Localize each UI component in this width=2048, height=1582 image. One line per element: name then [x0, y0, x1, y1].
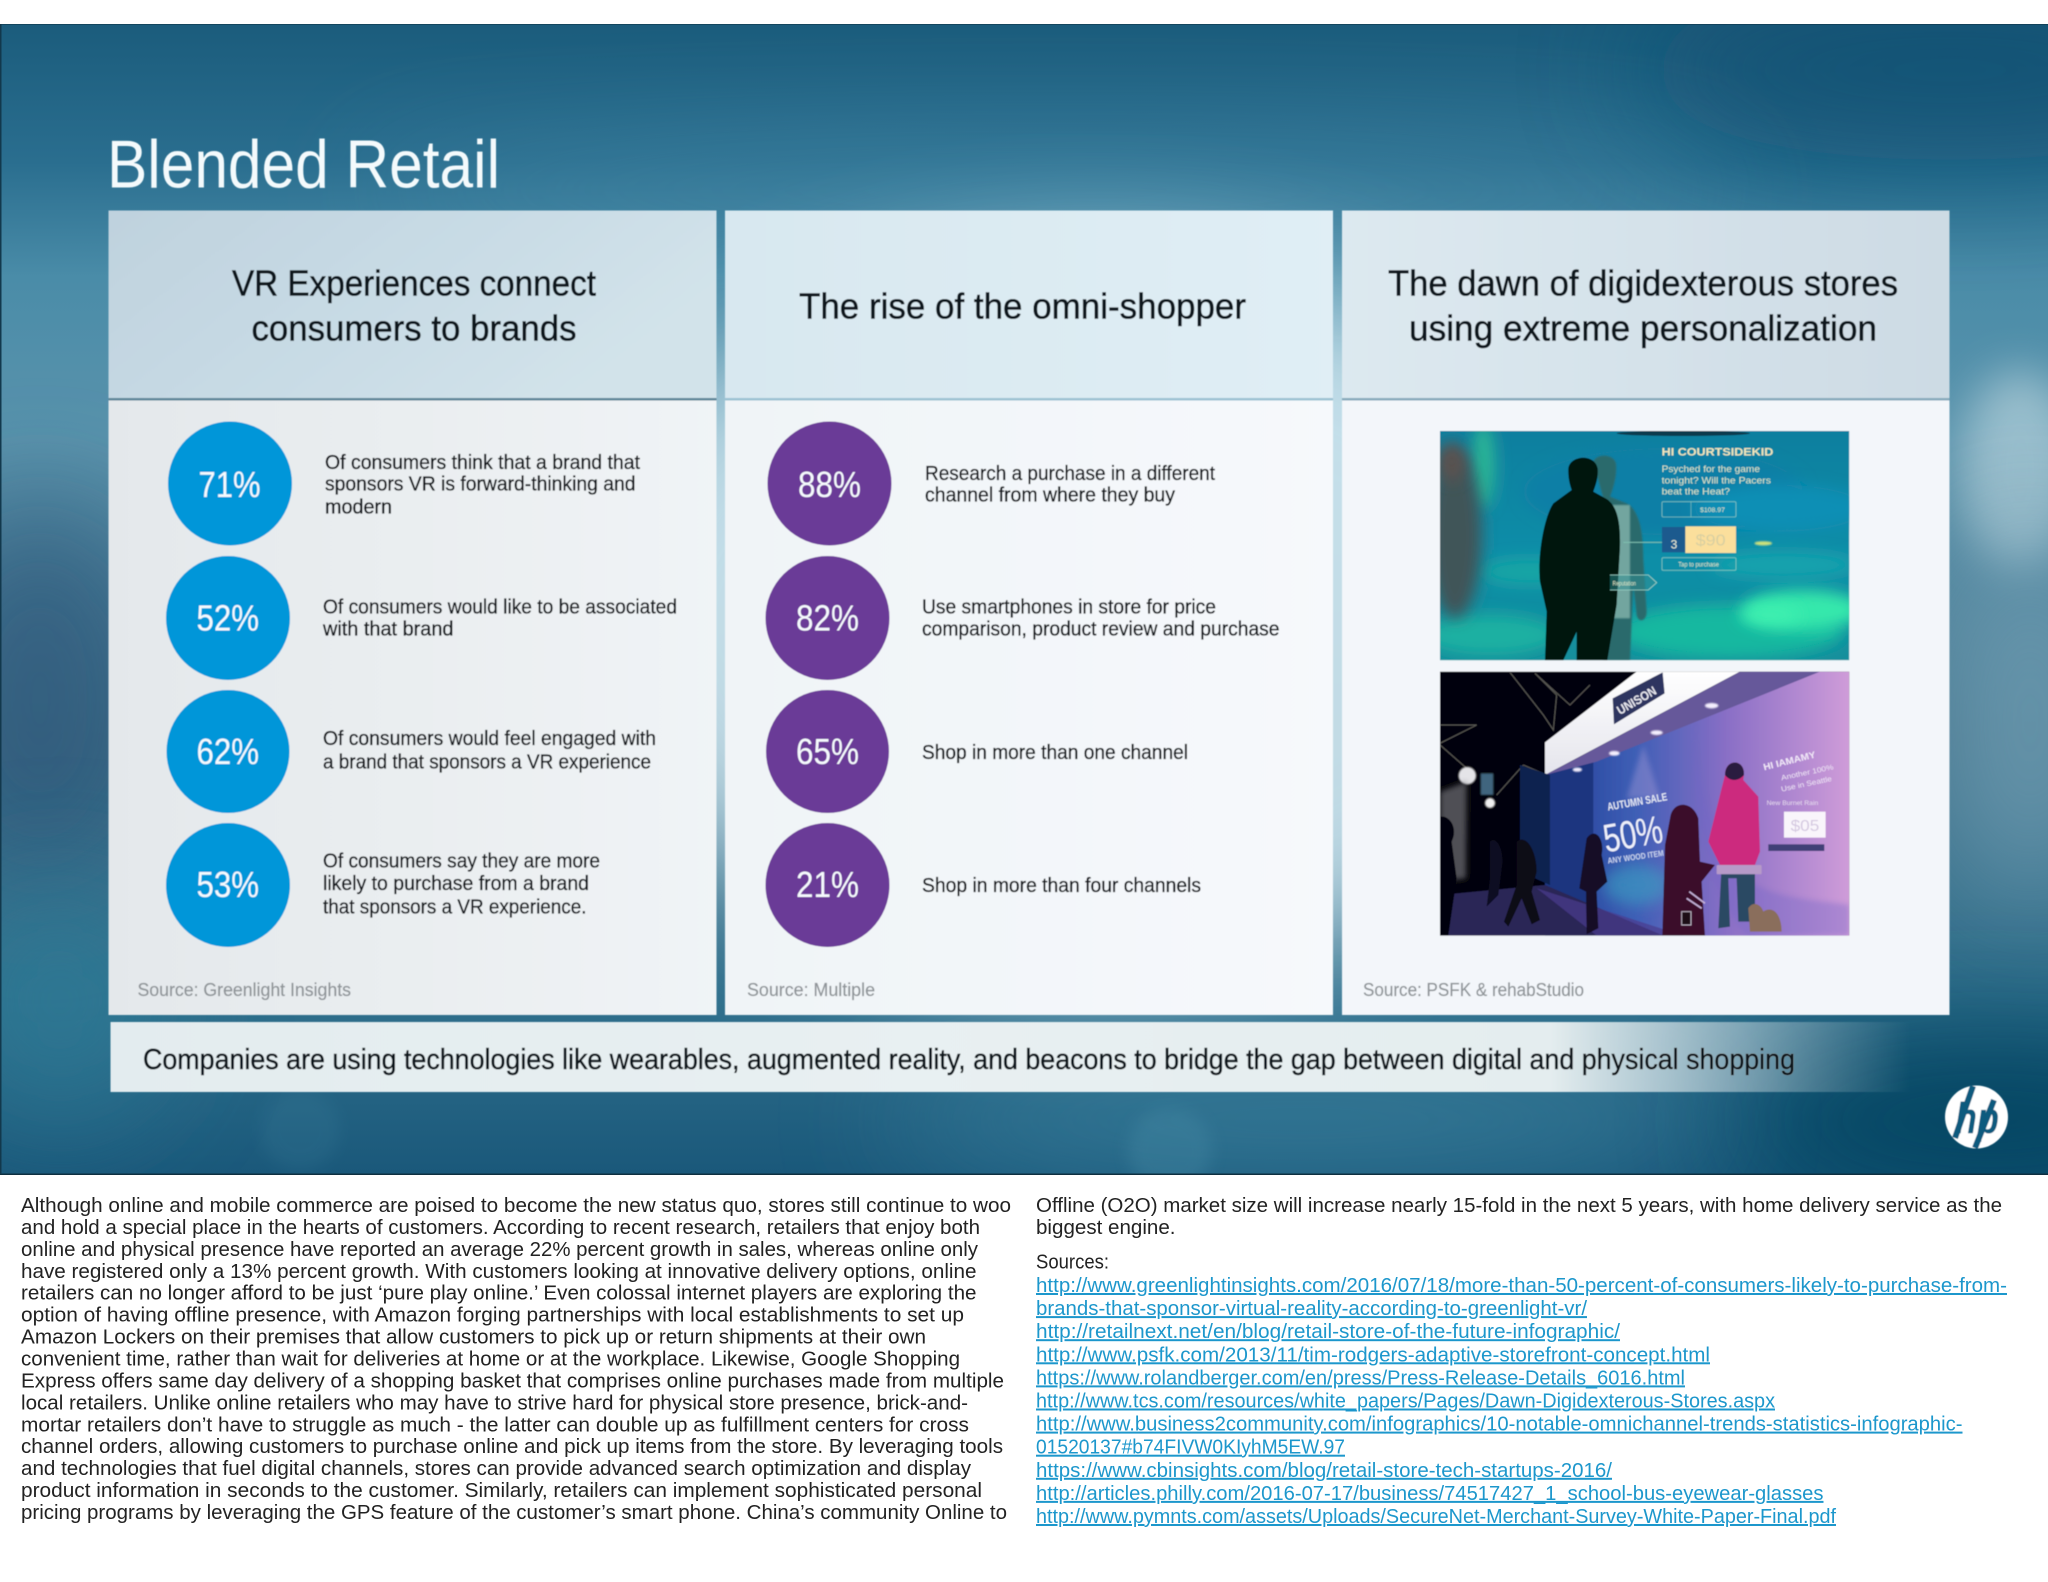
overlay: sale message: ANY WOOD ITEM	[1607, 848, 1664, 866]
overlay: sale message: AUTUMN SALE	[1606, 791, 1668, 814]
stat: 82%	[766, 556, 1280, 680]
panel header: VR experiences: VR Experiences connect	[232, 262, 596, 304]
overlay: personalised offer: New Burnet Rain	[1767, 800, 1819, 807]
store wall	[1545, 672, 1849, 936]
stat: 71%: 71%	[198, 464, 260, 505]
stat: 52%: with that brand	[322, 618, 454, 640]
stat: 65%: 65%	[796, 731, 859, 772]
stat: 88%: Research a purchase in a different	[925, 463, 1215, 485]
panel body background	[108, 400, 716, 1015]
article text: left column: online and physical presence have reported an average 22% percent growth in sales, whereas online only	[21, 1239, 978, 1261]
shopper silhouette	[1539, 458, 1620, 660]
panel: omni-shopper	[725, 210, 1333, 1015]
stat: 62%: 62%	[196, 731, 259, 772]
sources list: http://www.greenlightinsights.com/2016/07/18/more-than-50-percent-of-consumers-likely-to-purchase-from-	[1036, 1275, 2007, 1297]
sources list: https://www.cbinsights.com/blog/retail-store-tech-startups-2016/	[1036, 1460, 1612, 1482]
stat: 53%: that sponsors a VR experience.	[323, 896, 586, 918]
panel body background	[1342, 400, 1950, 1015]
stat: 65%: Shop in more than one channel	[922, 742, 1188, 764]
panel header: digidexterous stores: The dawn of digidexterous stores	[1388, 262, 1898, 304]
stat: 21%: Shop in more than four channels	[922, 875, 1201, 897]
stat: 88%: channel from where they buy	[925, 484, 1175, 506]
overlay: personalised message: 3	[1671, 538, 1678, 552]
overlay: personalised message: Psyched for the game	[1662, 464, 1760, 474]
sources list	[1036, 1252, 2007, 1528]
stat: 88%	[768, 422, 1215, 546]
storefront floor	[1440, 885, 1663, 936]
article text: left column: convenient time, rather than wait for deliveries at home or at the workplace. Likewise, Google Shopping	[21, 1348, 960, 1370]
stat: 82%: comparison, product review and purchase	[922, 618, 1280, 640]
panel: digidexterous stores	[1342, 210, 1950, 1015]
sources list: http://www.psfk.com/2013/11/tim-rodgers-adaptive-storefront-concept.html	[1036, 1344, 1710, 1366]
sources list: http://retailnext.net/en/blog/retail-store-of-the-future-infographic/	[1036, 1321, 1620, 1343]
stat: 52%: Of consumers would like to be associated	[323, 596, 677, 618]
source: Greenlight Insights: Source: Greenlight Insights	[138, 980, 351, 1000]
stat: 53%: likely to purchase from a brand	[323, 873, 589, 895]
article text: left column: local retailers. Unlike online retailers who may have to strive hard for physical store presence, brick-and-	[21, 1392, 968, 1414]
article text: left column: Express offers same day delivery of a shopping basket that comprises online purchases made from multiple	[21, 1370, 1004, 1392]
panel body background	[725, 400, 1333, 1015]
lights	[1459, 767, 1476, 784]
stat: 21%: 21%	[796, 864, 859, 905]
stat: 71%: Of consumers think that a brand that	[325, 452, 640, 474]
panel header: omni-shopper	[725, 210, 1333, 400]
article text: left column: mortar retailers don’t have to struggle as much - the latter can double up as fulfillment centers for cross	[21, 1414, 969, 1436]
article text: left column: Amazon Lockers on their premises that allow customers to pick up or return shipments at their own	[21, 1327, 926, 1349]
sign: UNISON	[1613, 672, 1665, 724]
image: digital storefront with shoppers	[1440, 672, 1849, 936]
article text: left column: have registered only a 13% percent growth. With customers looking at innovative delivery options, online	[21, 1261, 976, 1283]
slide: blended retail	[0, 0, 2048, 1210]
stat: 71%: sponsors VR is forward-thinking and	[325, 474, 636, 496]
second figure	[1593, 456, 1647, 660]
customer in pink coat	[1708, 762, 1760, 865]
sources list: brands-that-sponsor-virtual-reality-according-to-greenlight-vr/	[1036, 1298, 1587, 1320]
stat: 88%: 88%	[798, 464, 861, 505]
image: shopper at interactive aurora display	[1423, 422, 1867, 660]
sources list: http://articles.philly.com/2016-07-17/business/74517427_1_school-bus-eyewear-glasses	[1036, 1483, 1824, 1505]
overlay: personalised offer: $05	[1791, 818, 1819, 835]
panel header: omni-shopper: The rise of the omni-shopper	[799, 286, 1246, 326]
article text: left column	[21, 1195, 1011, 1524]
stat: 52%	[166, 556, 677, 680]
dog	[1748, 904, 1782, 932]
article text: left column: product information in seconds to the customer. Similarly, retailers can implement sophisticated personal	[21, 1480, 982, 1502]
panel header: digidexterous stores: using extreme personalization	[1409, 308, 1877, 348]
overlay: personalised message: Tap to purchase	[1678, 561, 1719, 568]
overlay: personalised message: beat the Heat?	[1662, 486, 1730, 496]
article text: right column: biggest engine.	[1036, 1217, 1176, 1239]
overlay: personalised offer	[1717, 749, 1835, 874]
overlay: sale message	[1600, 791, 1668, 866]
sources list: 01520137#b74FIVW0KIyhM5EW.97	[1036, 1437, 1345, 1459]
panel: VR experiences	[108, 210, 716, 1015]
article text: right column	[1036, 1195, 2007, 1528]
overlay: personalised offer: Another 100%	[1780, 762, 1835, 782]
stat: 71%: modern	[325, 496, 392, 518]
sources list: Sources:	[1036, 1252, 1109, 1274]
panel header: VR experiences	[108, 210, 716, 400]
overlay: personalised message: HI COURTSIDEKID	[1662, 447, 1773, 459]
customer in hood	[1662, 805, 1715, 936]
sign: UNISON: UNISON	[1614, 684, 1659, 718]
sources list: http://www.tcs.com/resources/white_papers/Pages/Dawn-Digidexterous-Stores.aspx	[1036, 1390, 1775, 1412]
article text: left column: and hold a special place in the hearts of customers. According to recent research, retailers that enjoy both	[21, 1217, 980, 1239]
logo: hp: hp	[1955, 1094, 1999, 1143]
stat: 53%: Of consumers say they are more	[323, 850, 600, 872]
callout bar	[110, 1022, 1910, 1092]
stat: 82%: 82%	[796, 598, 859, 638]
overlay: personalised message	[1610, 447, 1773, 590]
article text: right column: Offline (O2O) market size will increase nearly 15-fold in the next 5 years, with home delivery service as the	[1036, 1195, 2002, 1217]
title: Blended Retail	[107, 126, 500, 202]
stat: 82%: Use smartphones in store for price	[922, 596, 1216, 618]
overlay: personalised message: $90	[1696, 533, 1726, 550]
stat: 52%: 52%	[196, 598, 259, 638]
sources list: http://www.business2community.com/infographics/10-notable-omnichannel-trends-statistics-infographic-	[1036, 1414, 1962, 1436]
wireframe decoration	[1440, 672, 1590, 795]
source: PSFK & rehabStudio: Source: PSFK & rehabStudio	[1363, 980, 1584, 1000]
overlay: personalised offer: Use in Seattle	[1780, 774, 1833, 794]
stat: 53%	[166, 823, 600, 947]
article text: left column: Although online and mobile commerce are poised to become the new status quo, stores still continue to woo	[21, 1195, 1011, 1217]
overlay: sale message: 50%	[1600, 808, 1666, 861]
article text: left column: retailers can no longer afford to be just ‘pure play online.’ Even colossal internet players are exploring the	[21, 1283, 976, 1305]
overlay: personalised message: tonight? Will the Pacers	[1662, 475, 1772, 485]
stat: 65%	[766, 690, 1188, 813]
article text: left column: pricing programs by leveraging the GPS feature of the customer’s smart phone. China’s community Online to	[21, 1502, 1007, 1524]
stat: 62%	[166, 690, 656, 813]
panel header: VR experiences: consumers to brands	[252, 308, 576, 348]
logo: hp	[1945, 1086, 2008, 1148]
sources list: http://www.pymnts.com/assets/Uploads/SecureNet-Merchant-Survey-White-Paper-Final.pdf	[1036, 1506, 1836, 1528]
overlay: personalised message: Reputation	[1613, 581, 1636, 588]
overlay: personalised message: $108.97	[1700, 508, 1726, 514]
background pedestrians	[1440, 817, 1457, 936]
article text: left column: channel orders, allowing customers to purchase online and pick up items from the store. By leveraging tools	[21, 1436, 1003, 1458]
panel header: digidexterous stores	[1342, 210, 1950, 400]
article text: left column: option of having offline presence, with Amazon forging partnerships with local establishments to set up	[21, 1305, 964, 1327]
callout bar: Companies are using technologies like wearables, augmented reality, and beacons to bridge the gap between digital and physical shopping	[143, 1044, 1795, 1076]
stat: 21%	[766, 823, 1201, 947]
sources list: https://www.rolandberger.com/en/press/Press-Release-Details_6016.html	[1036, 1367, 1685, 1389]
stat: 62%: a brand that sponsors a VR experience	[323, 752, 651, 774]
storefront awning	[1545, 672, 1740, 775]
overlay: personalised offer: HI IAMAMY	[1762, 749, 1817, 772]
stat: 71%	[168, 422, 640, 546]
slide background	[0, 0, 2048, 1210]
stat: 53%: 53%	[196, 864, 259, 905]
source: Multiple: Source: Multiple	[747, 980, 875, 1000]
article text: left column: and technologies that fuel digital channels, stores can provide advanced search optimization and display	[21, 1458, 971, 1480]
stat: 62%: Of consumers would feel engaged with	[323, 728, 656, 750]
